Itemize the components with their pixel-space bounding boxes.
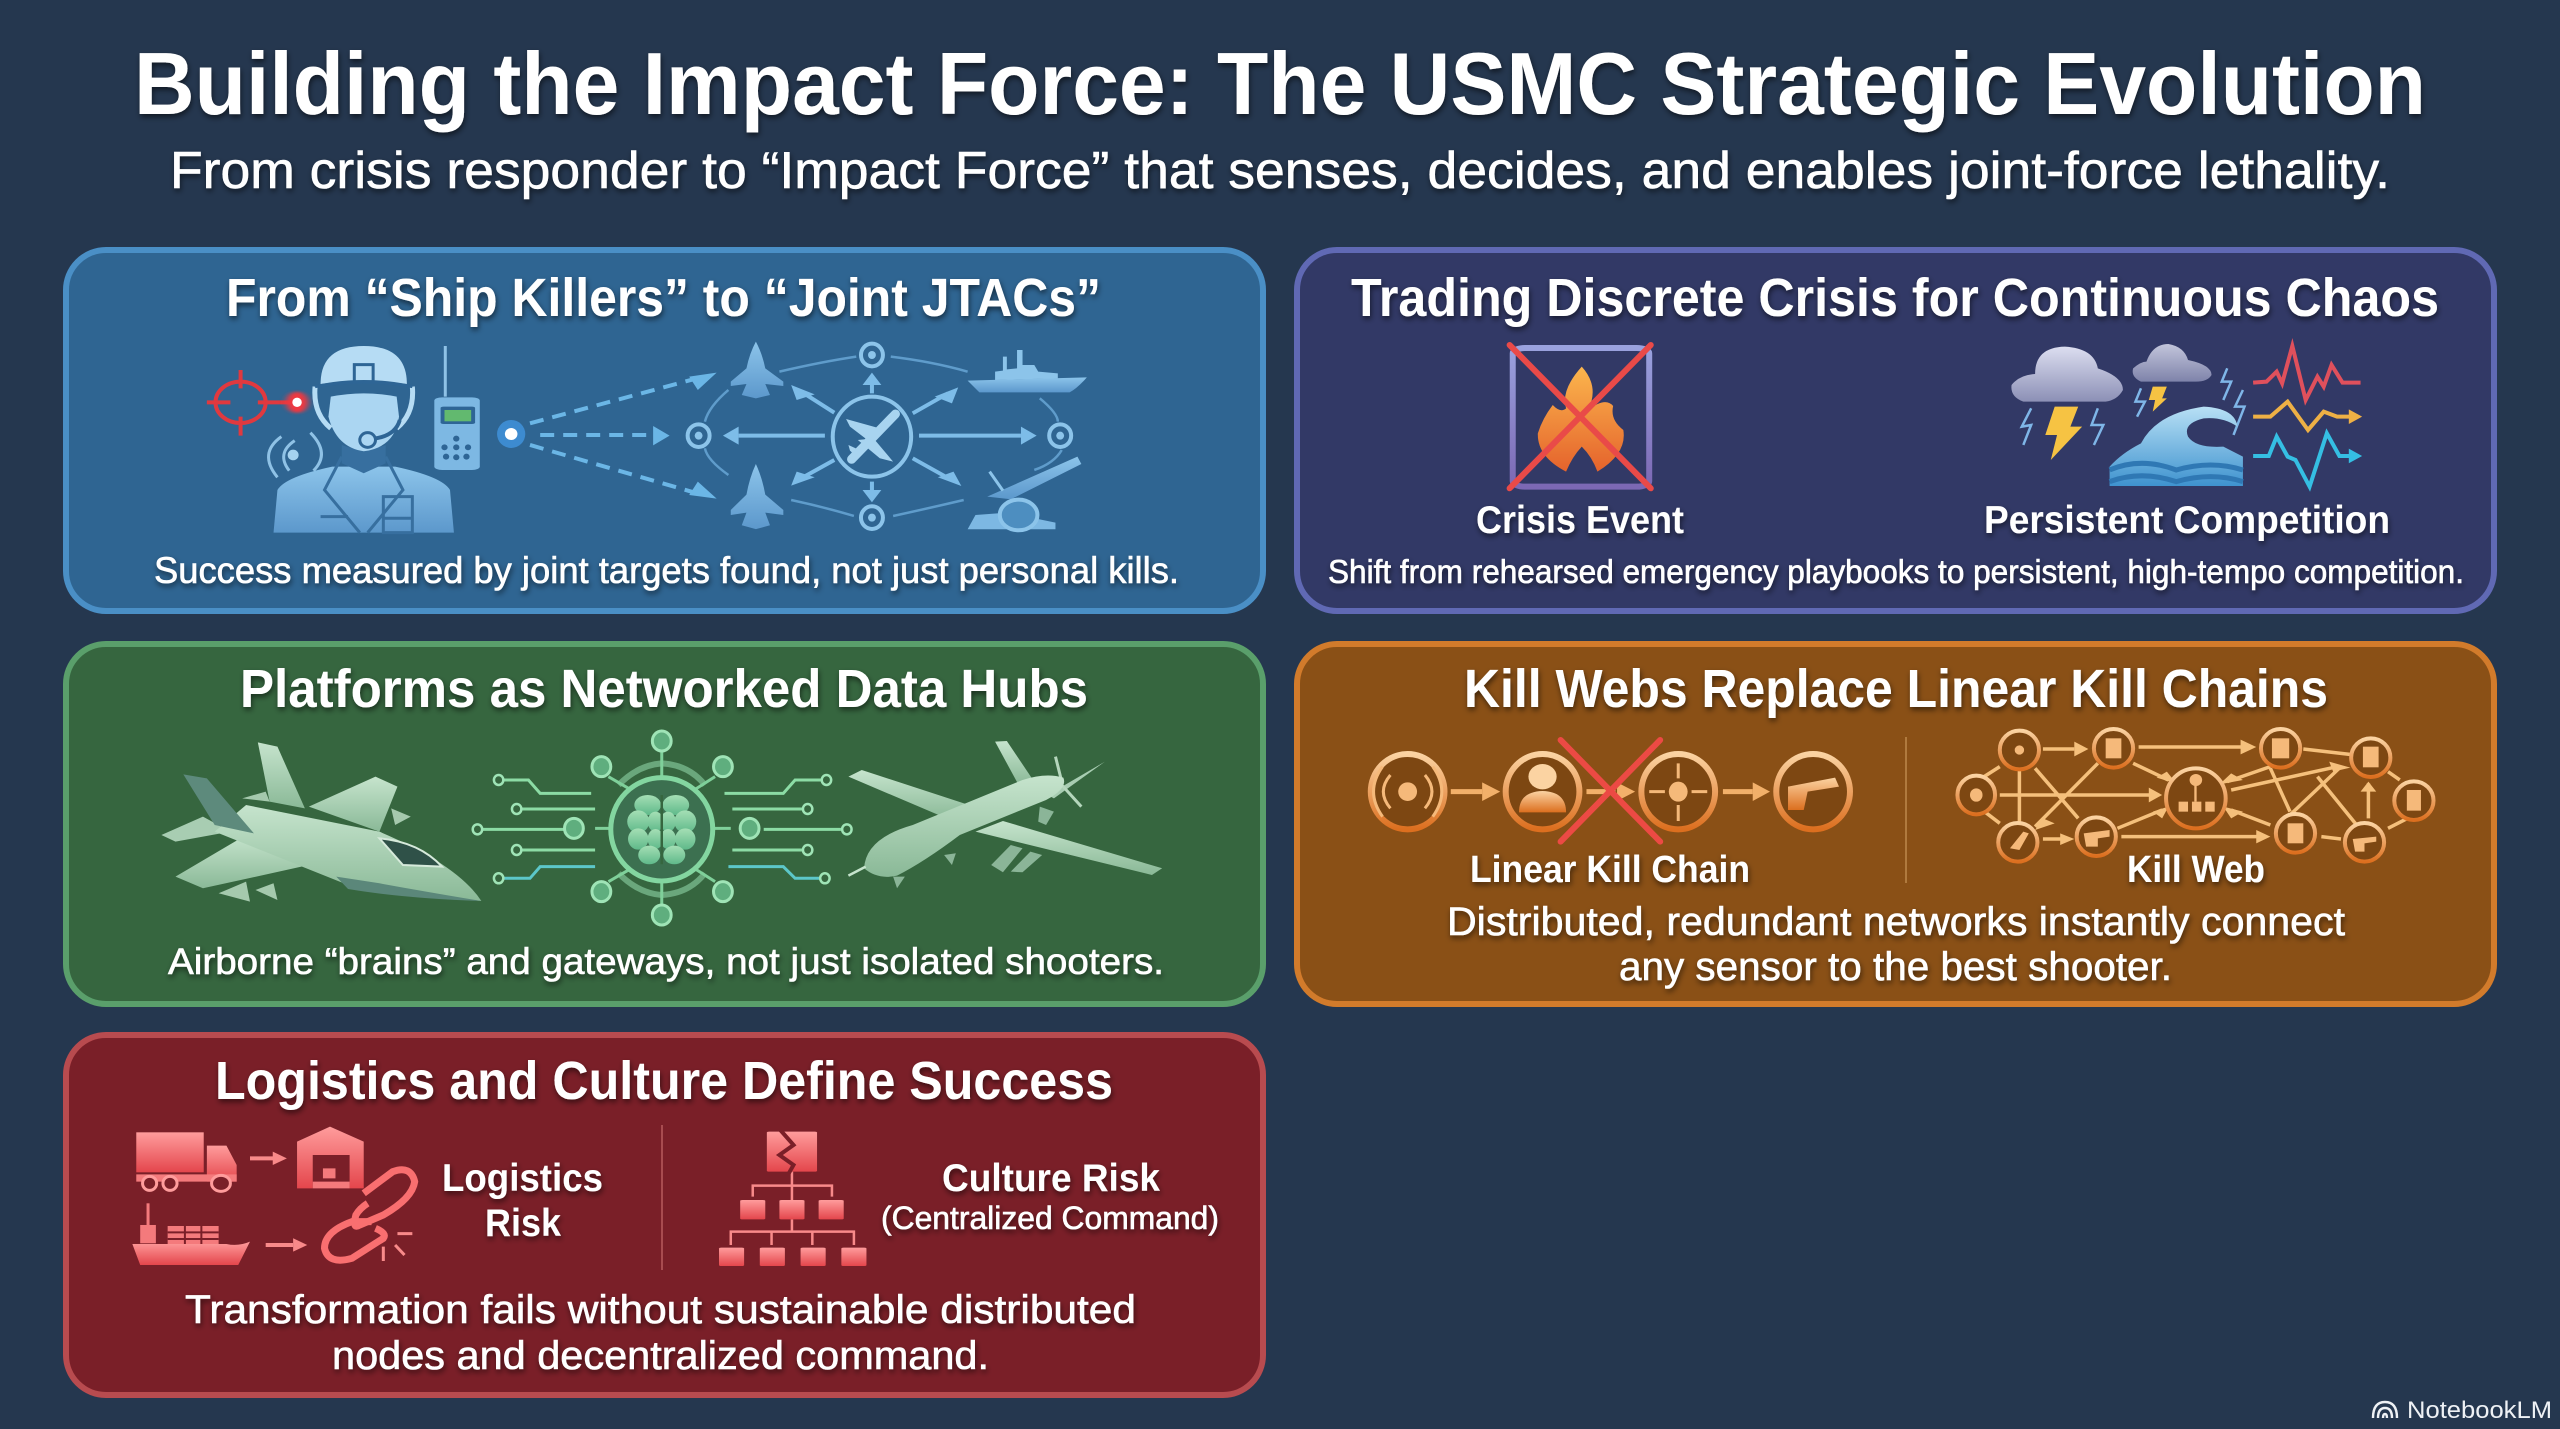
watermark: NotebookLM: NotebookLM	[2407, 1397, 2552, 1424]
text: logistics caption: nodes and decentralized command.	[332, 1334, 989, 1378]
text: logistics caption	[185, 1288, 1136, 1378]
heading: data hubs: Platforms as Networked Data Hubs	[240, 659, 1088, 719]
icon: drone	[848, 741, 1162, 888]
text: kill webs caption: any sensor to the best shooter.	[1619, 945, 2172, 989]
title: Building the Impact Force: The USMC Strategic Evolution	[134, 34, 2426, 133]
label: logistics risk	[442, 1157, 603, 1245]
heading: logistics and culture: Logistics and Culture Define Success	[215, 1051, 1113, 1111]
text: ship killers caption: Success measured by joint targets found, not just personal kills.	[154, 550, 1179, 591]
icon: storms and waves	[2011, 344, 2244, 486]
text: kill webs caption	[1447, 900, 2345, 989]
text: logistics caption: Transformation fails without sustainable distributed	[185, 1288, 1136, 1332]
icon: broadcast node and dashed links	[497, 373, 717, 499]
icon: crossed-out crisis flame	[1510, 345, 1651, 488]
label: culture risk: (Centralized Command)	[881, 1200, 1219, 1236]
heading: continuous chaos: Trading Discrete Crisis for Continuous Chaos	[1351, 268, 2439, 328]
icon: stealth fighter	[161, 742, 481, 902]
icon: JTAC soldier	[269, 346, 454, 533]
panel: From Ship Killers to Joint JTACs	[66, 250, 1263, 611]
heading: ship killers: From “Ship Killers” to “Joint JTACs”	[226, 268, 1101, 328]
panel: Kill Webs Replace Linear Kill Chains	[1297, 644, 2494, 1004]
chart: kill web	[1957, 729, 2434, 862]
text: data hubs caption: Airborne “brains” and gateways, not just isolated shooters.	[168, 941, 1164, 982]
label: kill web: Kill Web	[2127, 849, 2265, 891]
icon: broken chain link	[325, 1170, 415, 1261]
icon: logistics supply line	[132, 1127, 364, 1265]
icon: handheld radio	[434, 346, 480, 470]
panel: Trading Discrete Crisis for Continuous Chaos	[1297, 250, 2494, 611]
panel: Logistics and Culture Define Success	[66, 1035, 1263, 1395]
chart: linear kill chain	[1371, 740, 1850, 842]
label: crisis event: Crisis Event	[1476, 499, 1684, 542]
label: logistics risk: Logistics	[442, 1157, 603, 1200]
subtitle: From crisis responder to “Impact Force” that senses, decides, and enables joint-force lethality.	[170, 142, 2390, 200]
label: logistics risk: Risk	[485, 1202, 561, 1245]
text: continuous chaos caption: Shift from rehearsed emergency playbooks to persistent, high-tempo competition.	[1328, 553, 2464, 590]
icon: brain hub	[473, 731, 852, 925]
icon: volatility pulses	[2253, 346, 2362, 487]
icon: effects network	[688, 342, 1087, 530]
heading: kill webs: Kill Webs Replace Linear Kill Chains	[1464, 659, 2328, 719]
label: culture risk: Culture Risk	[942, 1157, 1160, 1200]
label: linear kill chain: Linear Kill Chain	[1470, 849, 1750, 891]
icon: centralized command hierarchy	[719, 1129, 866, 1266]
label: culture risk	[881, 1157, 1219, 1236]
icon: target crosshair	[207, 370, 308, 436]
text: kill webs caption: Distributed, redundant networks instantly connect	[1447, 900, 2345, 944]
label: persistent competition: Persistent Competition	[1984, 499, 2390, 542]
divider: logistics vs culture	[661, 1125, 663, 1270]
panel: Platforms as Networked Data Hubs	[66, 644, 1263, 1004]
divider: chain vs web	[1905, 737, 1907, 883]
